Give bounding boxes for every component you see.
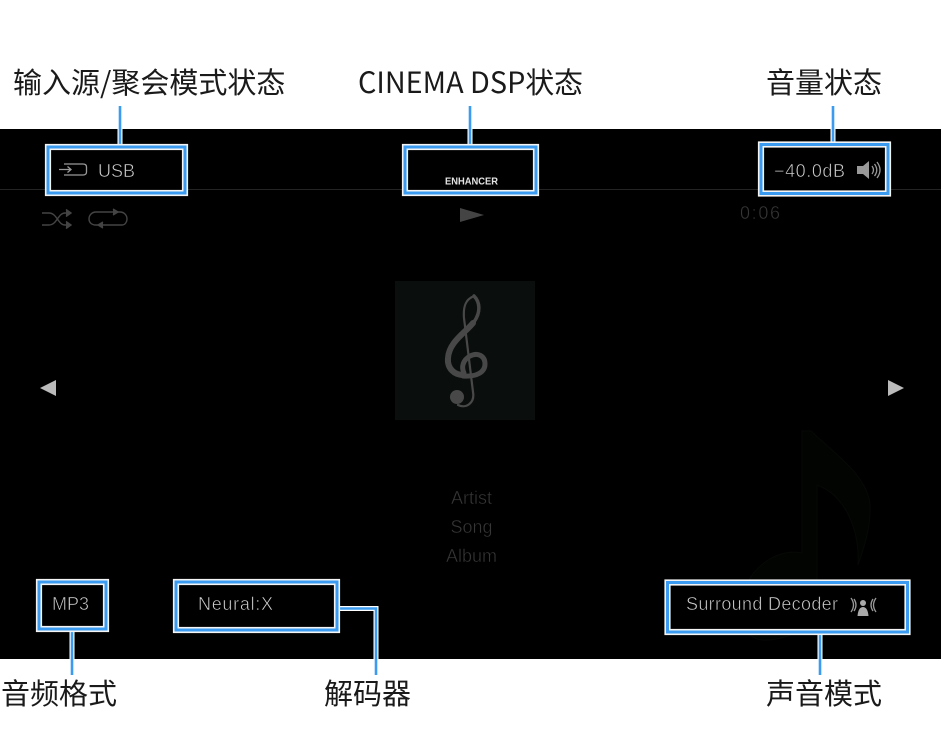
text: track info: Song <box>450 517 493 537</box>
icon: speaker <box>857 161 880 179</box>
icon: repeat <box>89 209 127 228</box>
heading: sound mode: 声音模式 <box>766 671 882 713</box>
icon: shuffle <box>42 210 71 228</box>
heading: input source status: 输入源/聚会模式状态 <box>13 60 285 102</box>
text: Neural:X: Neural:X <box>198 594 273 614</box>
text: Surround Decoder: Surround Decoder <box>686 594 838 614</box>
heading: volume status: 音量状态 <box>766 60 882 102</box>
panel: album art <box>395 281 535 420</box>
callout: decoder box <box>176 582 376 675</box>
icon: play <box>460 208 484 222</box>
icon: treble clef <box>448 296 485 406</box>
heading: CINEMA DSP status: CINEMA DSP状态 <box>358 60 583 102</box>
text: elapsed time: 0:06 <box>740 203 780 223</box>
callout: CINEMA DSP box <box>405 106 536 193</box>
callout: volume box <box>761 106 888 194</box>
text: ENHANCER: ENHANCER <box>445 176 499 188</box>
arrow: next <box>888 380 904 396</box>
text: track info: Album <box>446 546 497 566</box>
icon: input <box>59 164 86 175</box>
text: track info: Artist <box>451 488 492 508</box>
heading: decoder: 解码器 <box>324 671 411 713</box>
arrow: previous <box>40 380 56 396</box>
callout: audio format box <box>39 582 106 675</box>
panel: black screen <box>0 129 941 659</box>
callout: sound mode box <box>668 582 908 675</box>
icon: large background music note <box>741 431 870 640</box>
heading: audio format: 音频格式 <box>1 671 117 713</box>
icon: surround <box>851 598 876 616</box>
text: volume value: −40.0dB <box>774 161 845 181</box>
callout: input source box <box>48 106 185 193</box>
text: track info <box>446 488 497 566</box>
text: MP3: MP3 <box>52 594 89 614</box>
text: USB: USB <box>98 161 135 181</box>
